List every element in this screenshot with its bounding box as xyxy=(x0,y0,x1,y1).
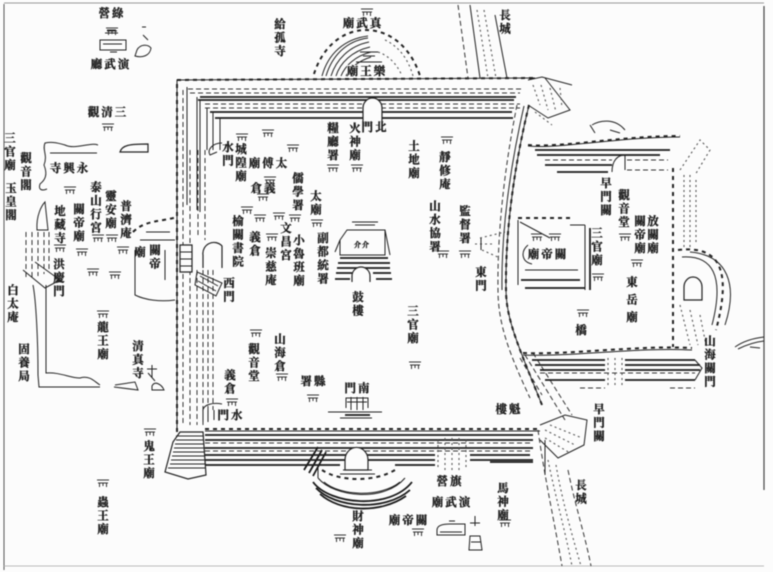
north gate arch xyxy=(363,98,382,122)
label: 南門: 南門 xyxy=(344,381,372,395)
east gate enclosure xyxy=(475,232,505,258)
label: 三官廟 west: 三官廟 xyxy=(3,132,16,172)
label: 山海倉: 山海倉 xyxy=(273,332,286,374)
label: 義倉 middle: 義倉 xyxy=(248,230,261,258)
drum tower xyxy=(335,222,392,282)
south water gate xyxy=(203,403,222,422)
label: 永興寺: 永興寺 xyxy=(50,161,90,175)
label: 西門: 西門 xyxy=(222,276,235,304)
label: 觀音堂: 觀音堂 xyxy=(247,342,260,384)
label: 真武廟: 真武廟 xyxy=(343,16,383,30)
label: 觀音堂 east: 觀音堂 xyxy=(617,188,630,230)
label: 演武廳: 演武廳 xyxy=(91,57,132,71)
north bastion xyxy=(314,30,420,76)
label: 火神廟: 火神廟 xyxy=(348,122,361,162)
west outer wall upper xyxy=(39,142,148,190)
label: 廟 barbican: 廟 xyxy=(133,245,146,260)
label: 東門: 東門 xyxy=(474,265,487,293)
label: 普濟庵: 普濟庵 xyxy=(119,199,132,240)
west gate arch xyxy=(203,242,222,268)
west gate tower xyxy=(195,272,222,296)
label: 橋: 橋 xyxy=(574,323,587,338)
label: 三官廟 east: 三官廟 xyxy=(590,227,603,268)
label: 馬神廟: 馬神廟 xyxy=(496,482,509,522)
label: 靜修庵: 靜修庵 xyxy=(438,150,451,192)
great wall south xyxy=(538,430,591,566)
label: 監督署: 監督署 xyxy=(458,204,471,246)
label: 糧廳署: 糧廳署 xyxy=(326,121,339,162)
south pagoda xyxy=(469,516,482,550)
great wall north xyxy=(458,5,507,78)
label: 泰山行宮: 泰山行宮 xyxy=(89,180,102,235)
label: 榆關書院: 榆關書院 xyxy=(231,214,244,269)
label: 演武廟: 演武廟 xyxy=(432,495,473,509)
label: 蟲王廟: 蟲王廟 xyxy=(96,495,109,536)
label: 旗營: 旗營 xyxy=(436,474,464,488)
small gate markers xyxy=(54,9,643,542)
west barbican xyxy=(133,217,192,301)
label: 太廟: 太廟 xyxy=(309,189,322,217)
east outer city wall xyxy=(523,121,710,388)
label: 關帝 barbican: 關帝 xyxy=(148,243,161,271)
label: 三官廟 central: 三官廟 xyxy=(406,305,419,346)
label: 財神廟: 財神廟 xyxy=(351,509,364,550)
label: 關帝廟 west: 關帝廟 xyxy=(72,202,85,244)
label: 洪慶門: 洪慶門 xyxy=(52,257,65,298)
label: 文昌宮: 文昌宮 xyxy=(279,221,292,262)
right edge tick xyxy=(735,337,764,349)
main city wall xyxy=(177,78,542,472)
label: 土地廟: 土地廟 xyxy=(407,139,420,180)
label: 小魯班廟: 小魯班廟 xyxy=(292,234,305,288)
label: 靈安廟: 靈安廟 xyxy=(104,189,117,230)
label: 鬼王廟: 鬼王廟 xyxy=(142,439,155,480)
label: 山海關門: 山海關門 xyxy=(703,334,716,389)
label: 固養局: 固養局 xyxy=(17,342,30,384)
label: 長城 north: 長城 xyxy=(498,9,511,36)
north water gate xyxy=(209,143,222,155)
label: 觀音閣: 觀音閣 xyxy=(19,151,32,192)
label: 三清觀: 三清觀 xyxy=(88,105,128,119)
label: 早門關 north: 早門關 xyxy=(599,177,612,218)
label: 北門: 北門 xyxy=(362,120,388,134)
label: 關帝廟 enclosure: 關帝廟 xyxy=(528,247,568,261)
label: 城隍廟: 城隍廟 xyxy=(234,142,247,184)
mosque icon xyxy=(147,365,164,390)
south gate pavilion xyxy=(328,397,382,418)
west outer wall lower xyxy=(23,202,138,390)
label: 早門關 south: 早門關 xyxy=(592,403,605,444)
label: 義倉 south: 義倉 xyxy=(223,368,236,396)
label: 山水協署: 山水協署 xyxy=(428,199,441,254)
label: 水門 south: 水門 xyxy=(218,408,244,422)
northwest drill hall xyxy=(100,30,126,52)
label: 鼓樓: 鼓樓 xyxy=(351,290,364,318)
label: 太傅廟: 太傅廟 xyxy=(249,156,289,170)
east city inner enclosure xyxy=(518,218,590,290)
label: 關帝廟 south: 關帝廟 xyxy=(389,513,429,527)
label: 崇慈庵: 崇慈庵 xyxy=(264,246,277,288)
drum tower: 介介 xyxy=(354,240,370,249)
label: 給孤寺: 給孤寺 xyxy=(273,17,286,58)
label: 義倉 upper: 義倉 xyxy=(250,181,278,195)
label: 綠營: 綠營 xyxy=(98,6,126,20)
label: 地藏寺: 地藏寺 xyxy=(53,204,66,246)
label: 清真寺: 清真寺 xyxy=(131,339,144,380)
label: 縣署: 縣署 xyxy=(300,374,328,388)
south drill hall xyxy=(437,521,465,535)
northwest pagoda xyxy=(135,27,151,57)
label: 水門 north: 水門 xyxy=(221,140,234,168)
label: 樂王廟 backing xyxy=(347,65,389,77)
southeast corner tower xyxy=(520,353,587,458)
label: 關帝廟 east: 關帝廟 xyxy=(633,214,646,256)
label: 副都統署: 副都統署 xyxy=(316,231,329,286)
south bastion xyxy=(304,447,412,509)
southwest corner tower xyxy=(165,432,206,479)
label: 魁樓: 魁樓 xyxy=(496,402,522,416)
label: 長城 south: 長城 xyxy=(574,479,587,506)
label: 龍王廟: 龍王廟 xyxy=(96,320,109,362)
label: 白太庵: 白太庵 xyxy=(6,283,19,324)
label: 玉皇閣: 玉皇閣 xyxy=(4,181,17,222)
label: 東岳廟: 東岳廟 xyxy=(625,275,638,328)
northeast corner tower xyxy=(528,77,572,125)
label: 樂王廟: 樂王廟 xyxy=(347,64,387,78)
label: 儒學署: 儒學署 xyxy=(291,171,305,212)
east bastion xyxy=(678,249,730,345)
label: 放關廟: 放關廟 xyxy=(646,214,659,256)
